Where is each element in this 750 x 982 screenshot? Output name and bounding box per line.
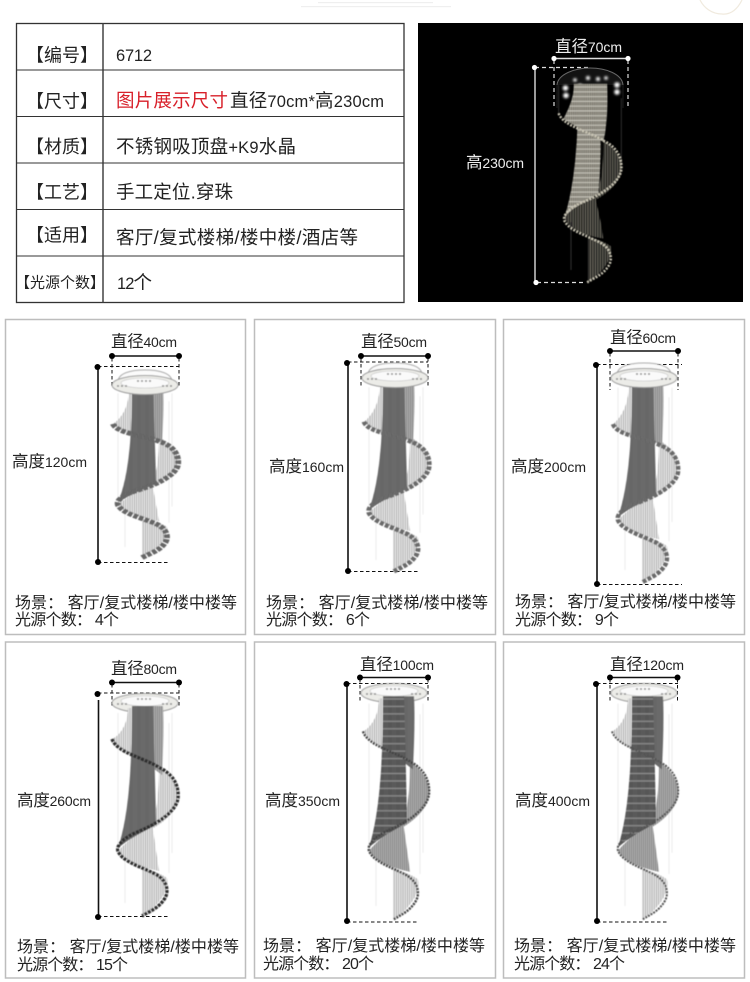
row: craft	[26, 182, 233, 202]
footer text	[263, 937, 485, 973]
dimension lines	[94, 680, 182, 920]
row: material: 【材质】	[26, 137, 98, 157]
row: craft: 【工艺】	[26, 182, 98, 202]
dimension label: height: 高230cm	[466, 153, 524, 172]
height label: 高度160cm	[269, 457, 344, 476]
diameter label: 直径100cm	[360, 655, 434, 674]
photo panel: lit chandelier on black	[418, 23, 743, 302]
faint top caption	[301, 2, 451, 7]
diameter dimension line	[551, 56, 631, 108]
footer text: 光源个数： 4个	[15, 611, 119, 629]
footer text: 场景： 客厅/复式楼梯/楼中楼等	[263, 937, 485, 955]
row: model number: 【编号】	[26, 46, 98, 66]
footer text: 光源个数： 9个	[515, 611, 619, 629]
row: model number	[26, 46, 152, 66]
footer text: 场景： 客厅/复式楼梯/楼中楼等	[514, 937, 736, 955]
footer text: 光源个数： 15个	[17, 956, 128, 974]
diameter label: 直径60cm	[610, 328, 676, 347]
row: application	[26, 226, 358, 248]
panel: 100cm model	[254, 642, 496, 978]
decorative corner flourish	[700, 0, 742, 14]
row: light source count	[15, 272, 152, 293]
diameter label: 直径50cm	[361, 332, 427, 351]
height dimension line	[532, 65, 590, 285]
footer text	[266, 594, 488, 629]
panel: 60cm model	[504, 320, 744, 634]
row: size: 【尺寸】	[26, 92, 98, 112]
footer text: 光源个数： 24个	[514, 955, 625, 973]
glowing canopy	[557, 68, 623, 108]
chandelier illustration	[362, 363, 429, 572]
panel: 120cm model	[504, 642, 744, 978]
chandelier illustration	[611, 363, 678, 582]
dimension lines	[344, 353, 431, 574]
dimension label: diameter: 直径70cm	[555, 37, 622, 56]
row: size: 图片展示尺寸	[116, 90, 228, 111]
panel: 80cm model	[6, 642, 246, 978]
footer text	[515, 593, 736, 629]
footer text	[514, 937, 736, 973]
height label: 高度350cm	[265, 791, 340, 810]
footer text: 场景： 客厅/复式楼梯/楼中楼等	[266, 594, 488, 612]
footer text: 场景： 客厅/复式楼梯/楼中楼等	[17, 938, 239, 956]
footer text: 场景： 客厅/复式楼梯/楼中楼等	[515, 593, 736, 611]
row: light source count: 【光源个数】	[15, 274, 105, 292]
diameter label: 直径80cm	[111, 659, 177, 678]
panel: 50cm model	[254, 320, 496, 634]
height label: 高度400cm	[515, 791, 590, 810]
specification table	[15, 24, 404, 302]
row: material	[26, 136, 296, 157]
chandelier illustration	[112, 370, 178, 558]
row: size	[26, 90, 384, 112]
footer text: 场景： 客厅/复式楼梯/楼中楼等	[15, 594, 237, 612]
row: light source count: 12个	[117, 272, 152, 293]
height label: 高度120cm	[12, 452, 87, 471]
panel: 40cm model	[6, 320, 246, 634]
footer text	[15, 594, 237, 629]
dimension lines	[94, 353, 182, 565]
row: craft: 手工定位.穿珠	[116, 182, 233, 202]
chandelier illustration	[611, 684, 678, 920]
height label: 高度200cm	[511, 457, 586, 476]
height label: 高度260cm	[17, 791, 91, 810]
footer text	[17, 938, 239, 974]
chandelier illustration	[361, 684, 429, 920]
row: material: 不锈钢吸顶盘+K9水晶	[116, 136, 296, 157]
chandelier illustration	[112, 694, 178, 916]
row: application: 客厅/复式楼梯/楼中楼/酒店等	[116, 227, 358, 248]
row: size: 直径70cm*高230cm	[230, 90, 384, 111]
footer text: 光源个数： 20个	[263, 955, 374, 973]
crystal spiral	[559, 84, 622, 282]
footer text: 光源个数： 6个	[266, 611, 370, 629]
row: application: 【适用】	[26, 226, 98, 246]
row: model number: 6712	[116, 47, 152, 65]
dimension lines	[593, 348, 682, 587]
diameter label: 直径120cm	[610, 655, 684, 674]
dimension lines	[344, 674, 431, 924]
diameter label: 直径40cm	[111, 332, 177, 351]
dimension lines	[593, 674, 680, 924]
